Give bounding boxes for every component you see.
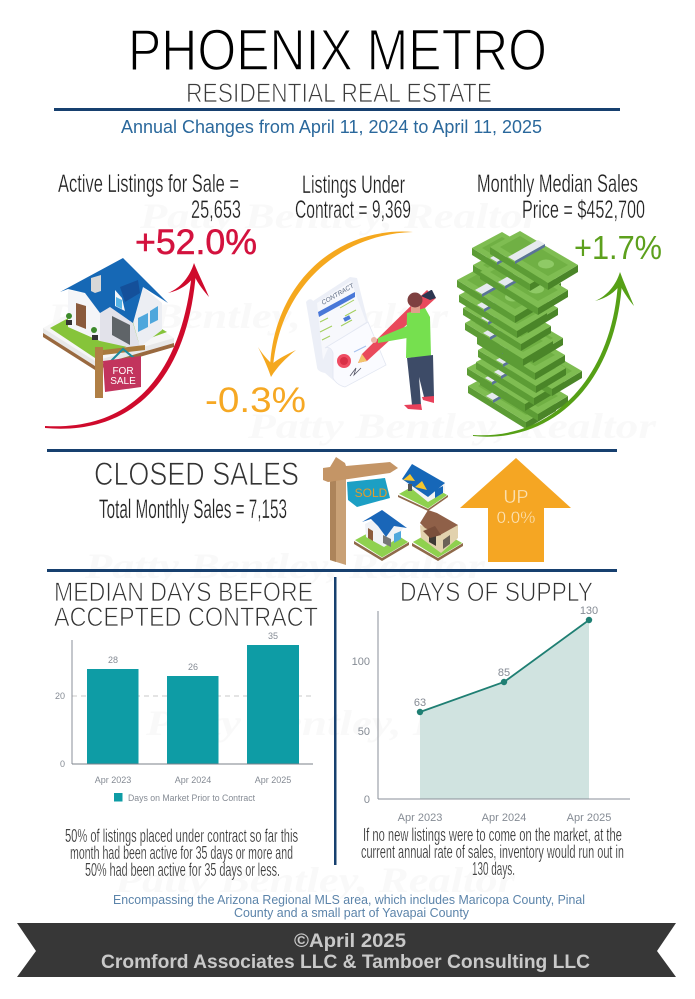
note: median days: month had been active for 35 days or more and (70, 843, 293, 863)
arrow: orange down (258, 232, 413, 377)
title: PHOENIX METRO (128, 18, 547, 83)
icon: white house (354, 510, 409, 561)
arrow: green up (473, 272, 634, 437)
line chart: 0 (364, 794, 370, 806)
line chart: 63 (414, 697, 426, 709)
note: median days: 50% of listings placed under contract so far this (65, 826, 298, 846)
heading: active listings: Active Listings for Sale = (58, 170, 239, 198)
panel: closed sales (94, 456, 571, 565)
bar chart: 28 (108, 655, 118, 665)
heading: under contract: Listings Under (302, 171, 405, 199)
heading: under contract: Contract = 9,369 (295, 196, 411, 224)
arrow: red up (45, 263, 209, 429)
icon: house for sale (43, 258, 174, 398)
watermark: Patty Bentley, Realtor (247, 406, 657, 446)
panel: median days (54, 577, 318, 880)
icon: sold sign (323, 457, 398, 565)
chart legend: Days on Market Prior to Contract (128, 793, 255, 803)
watermark: Patty Bentley, Realtor (114, 860, 516, 900)
watermark: Patty Bentley, Realtor (145, 703, 551, 743)
bar chart: Apr 2025 (255, 775, 291, 785)
arrow: up 0.0%: UP (503, 487, 529, 507)
watermark: Patty Bentley, Realtor (139, 196, 541, 236)
heading: days of supply: DAYS OF SUPPLY (400, 577, 593, 607)
arrow: up 0.0% (460, 458, 571, 562)
icon: signing contract (306, 277, 436, 410)
stat: +1.7%: +1.7% (574, 229, 662, 266)
note: days of supply (361, 825, 624, 879)
footnote: coverage area: Encompassing the Arizona Regional MLS area, which includes Maricopa County, Pinal (113, 893, 585, 907)
watermark (47, 196, 657, 900)
heading: under contract (295, 171, 411, 224)
line chart: 85 (498, 667, 510, 679)
line chart: Apr 2023 (398, 812, 442, 824)
stat: -0.3%: -0.3% (205, 381, 306, 420)
arrow: up 0.0%: 0.0% (497, 508, 535, 527)
icon: sold sign: SOLD (355, 486, 388, 500)
icon: tan house (412, 510, 463, 561)
icon: signing contract: CONTRACT (320, 282, 356, 307)
footnote: coverage area (113, 893, 585, 920)
bar chart: 0 (60, 759, 65, 769)
line chart: Apr 2025 (567, 812, 611, 824)
subtitle: RESIDENTIAL REAL ESTATE (186, 78, 492, 108)
panel: active listings (43, 170, 257, 429)
bar chart: Apr 2024 (175, 775, 211, 785)
heading: active listings: 25,653 (191, 196, 241, 224)
line chart: 50 (358, 726, 370, 738)
divider (334, 577, 336, 865)
bar chart (55, 631, 313, 785)
heading: median days: ACCEPTED CONTRACT (54, 602, 318, 632)
date range: Annual Changes from April 11, 2024 to April 11, 2025 (121, 117, 542, 137)
icon: blue house (398, 464, 448, 511)
note: median days: 50% had been active for 35 days or less. (85, 860, 280, 880)
panel: days of supply (352, 577, 630, 879)
footer ribbon (17, 923, 676, 977)
bar chart: 20 (55, 691, 65, 701)
line chart: 130 (580, 605, 598, 617)
note: median days (65, 826, 298, 880)
heading: closed sales: CLOSED SALES (94, 456, 299, 492)
heading: active listings (58, 170, 241, 224)
divider (47, 569, 617, 572)
divider (47, 449, 617, 452)
bar chart: 35 (268, 631, 278, 641)
watermark: Patty Bentley, Realtor (84, 546, 486, 586)
heading: median days: MEDIAN DAYS BEFORE (54, 577, 313, 607)
stat: +52.0%: +52.0% (135, 223, 257, 262)
footer ribbon: Cromford Associates LLC & Tamboer Consulting LLC (101, 952, 590, 973)
panel: listings under contract (205, 171, 436, 420)
line chart (352, 605, 630, 824)
footer ribbon: ©April 2025 (294, 931, 406, 952)
line chart: Apr 2024 (482, 812, 526, 824)
watermark: Patty Bentley, Realtor (47, 296, 449, 336)
line chart: 100 (352, 656, 370, 668)
icon: money stack (457, 231, 582, 429)
icon: house for sale: SALE (110, 376, 136, 387)
footnote: coverage area: County and a small part of Yavapai County (234, 906, 470, 920)
heading: median price (477, 170, 645, 224)
note: days of supply: 130 days. (472, 859, 515, 879)
bar chart: Apr 2023 (95, 775, 131, 785)
bar chart: 26 (188, 662, 198, 672)
heading: median days (54, 577, 318, 632)
total monthly sales: Total Monthly Sales = 7,153 (99, 494, 287, 524)
icon: house for sale: FOR (112, 366, 134, 377)
panel: median sales price (457, 170, 662, 437)
